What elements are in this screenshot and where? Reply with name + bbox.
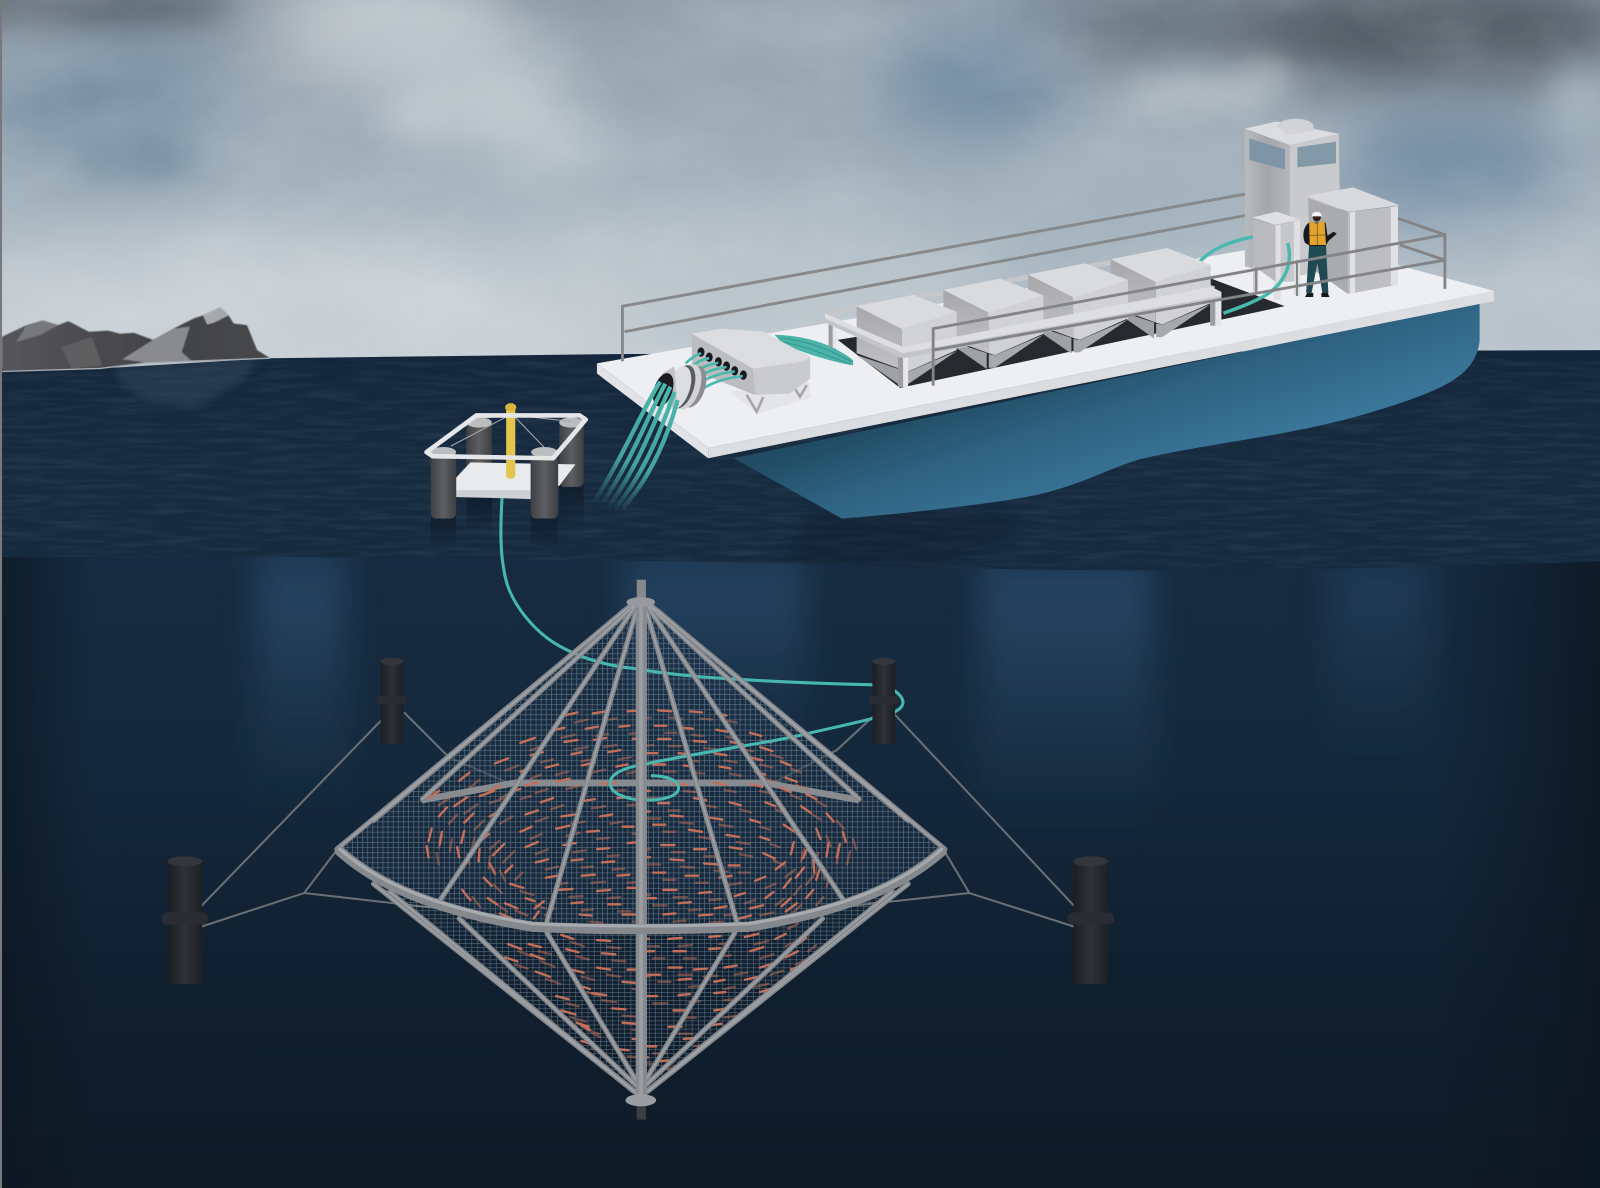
platform wires <box>451 415 571 447</box>
sea surface <box>0 350 1600 582</box>
hoses falling to the water <box>594 382 678 508</box>
feed cable from platform to pen <box>501 498 903 800</box>
float reflections <box>431 485 584 552</box>
net mesh <box>337 599 945 1098</box>
hopper frame <box>825 287 1221 387</box>
mooring buoy front right <box>1067 856 1114 984</box>
mooring buoy front left <box>161 856 208 984</box>
net pen <box>337 498 945 1120</box>
sky with clouds <box>0 0 1600 367</box>
top and bottom hubs <box>626 597 656 1106</box>
distributor box <box>686 329 810 412</box>
distributor deck shadow <box>730 380 811 413</box>
mooring buoy back right <box>868 658 899 744</box>
back ring of frame <box>421 783 859 800</box>
hose outlet pipe <box>649 361 711 413</box>
deck well <box>838 279 1285 388</box>
platform deck <box>456 462 576 499</box>
worker in safety vest <box>1303 212 1337 297</box>
large cabinet <box>1307 187 1399 294</box>
front floats <box>431 447 558 518</box>
small cabinet <box>1253 212 1300 300</box>
underwater section <box>2 557 1600 966</box>
frame legs <box>829 298 1221 387</box>
mooring buoy back left <box>377 658 407 744</box>
back floats <box>466 417 584 487</box>
near railing <box>933 218 1445 386</box>
feed hoses at stern <box>1200 237 1289 313</box>
feed hoppers <box>857 248 1211 385</box>
barge <box>594 119 1494 518</box>
mountain island <box>2 307 270 408</box>
central pole <box>636 580 647 1120</box>
front ring of frame <box>340 849 942 929</box>
left image edge strip <box>0 0 2 1188</box>
yellow post <box>505 403 516 479</box>
barge deck <box>597 240 1494 458</box>
platform frame <box>427 415 586 458</box>
distributor outlet holes <box>698 347 747 380</box>
frame top band <box>825 287 1221 358</box>
far railing <box>622 194 1246 361</box>
hopper frame back rail <box>827 261 1214 313</box>
control tower <box>1245 119 1341 278</box>
mooring ropes <box>201 709 1074 927</box>
surface buoy platform <box>427 403 586 552</box>
salmon inside the pen <box>427 710 856 1069</box>
hoses into distributor <box>686 353 743 388</box>
barge hull <box>734 302 1480 518</box>
net frame spars <box>337 602 945 1093</box>
hose band between distributor and hoppers <box>774 335 853 365</box>
